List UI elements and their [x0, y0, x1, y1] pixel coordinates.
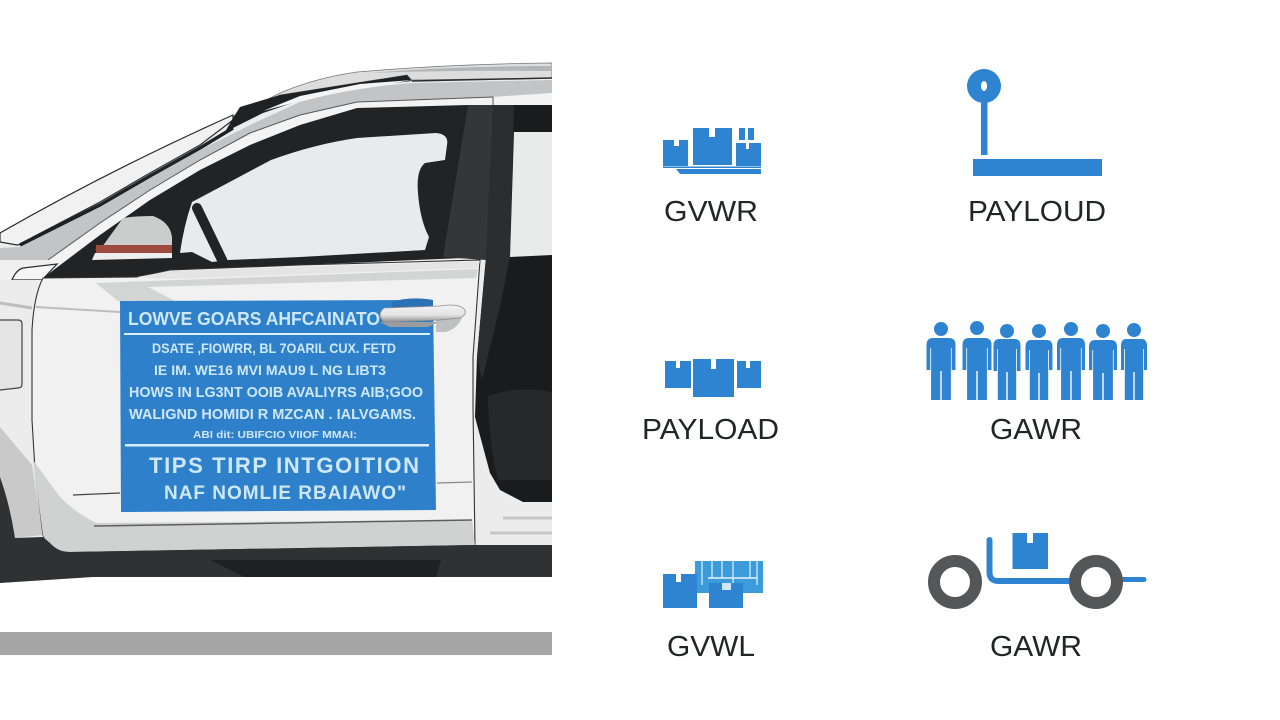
label body text: HOWS IN LG3NT OOIB AVALIYRS AIB;GOO	[129, 384, 423, 401]
label body text: DSATE ,FIOWRR, BL 7OARIL CUX. FETD	[152, 341, 396, 356]
label tips text	[149, 458, 418, 499]
steering wheel	[197, 208, 223, 262]
label body text: WALIGND HOMIDI R MZCAN . IALVGAMS.	[129, 406, 416, 423]
blue door information label	[120, 298, 436, 512]
item: GAWR axle	[934, 533, 1144, 663]
label: GAWR	[990, 631, 1082, 663]
window glass	[180, 133, 447, 262]
label: GVWR	[664, 196, 758, 228]
item: GAWR people	[926, 321, 1147, 446]
label: PAYLOAD	[642, 414, 779, 446]
item: PAYLOAD	[642, 359, 779, 446]
car body shell	[0, 78, 552, 545]
front fender	[0, 280, 43, 538]
item: PAYLOUD	[967, 69, 1106, 228]
icon: three boxes	[665, 359, 761, 397]
label tips text: NAF NOMLIE RBAIAWO"	[164, 483, 406, 504]
icon: row of people	[926, 321, 1147, 400]
label: GAWR	[990, 414, 1082, 446]
icon: boxes on pallet	[663, 128, 761, 174]
window frame	[43, 105, 493, 278]
door handle	[380, 305, 465, 332]
label tips text: TIPS TIRP INTGOITION	[149, 453, 419, 478]
icon: stacked boxes	[663, 561, 763, 608]
item: GVWR	[663, 128, 761, 228]
item: GVWL	[663, 561, 763, 663]
roof and windshield trim	[0, 63, 552, 280]
label: GVWL	[667, 631, 755, 663]
label body text: ABI dit: UBIFCIO VIIOF MMAI:	[193, 430, 357, 441]
label heading: LOWVE GOARS AHFCAINATO	[128, 309, 380, 329]
illustration: car side with door label	[0, 63, 552, 583]
front door	[32, 260, 480, 552]
ground bar	[0, 632, 552, 655]
label body text	[129, 341, 423, 441]
icon: axle chassis with box	[934, 533, 1144, 603]
side mirror	[92, 216, 172, 260]
label: PAYLOUD	[968, 196, 1106, 228]
pillar	[443, 105, 493, 260]
icon: scale	[967, 69, 1102, 176]
lower sill	[0, 477, 552, 583]
label body text: IE IM. WE16 MVI MAU9 L NG LIBT3	[154, 363, 387, 378]
rear opening	[475, 105, 552, 533]
